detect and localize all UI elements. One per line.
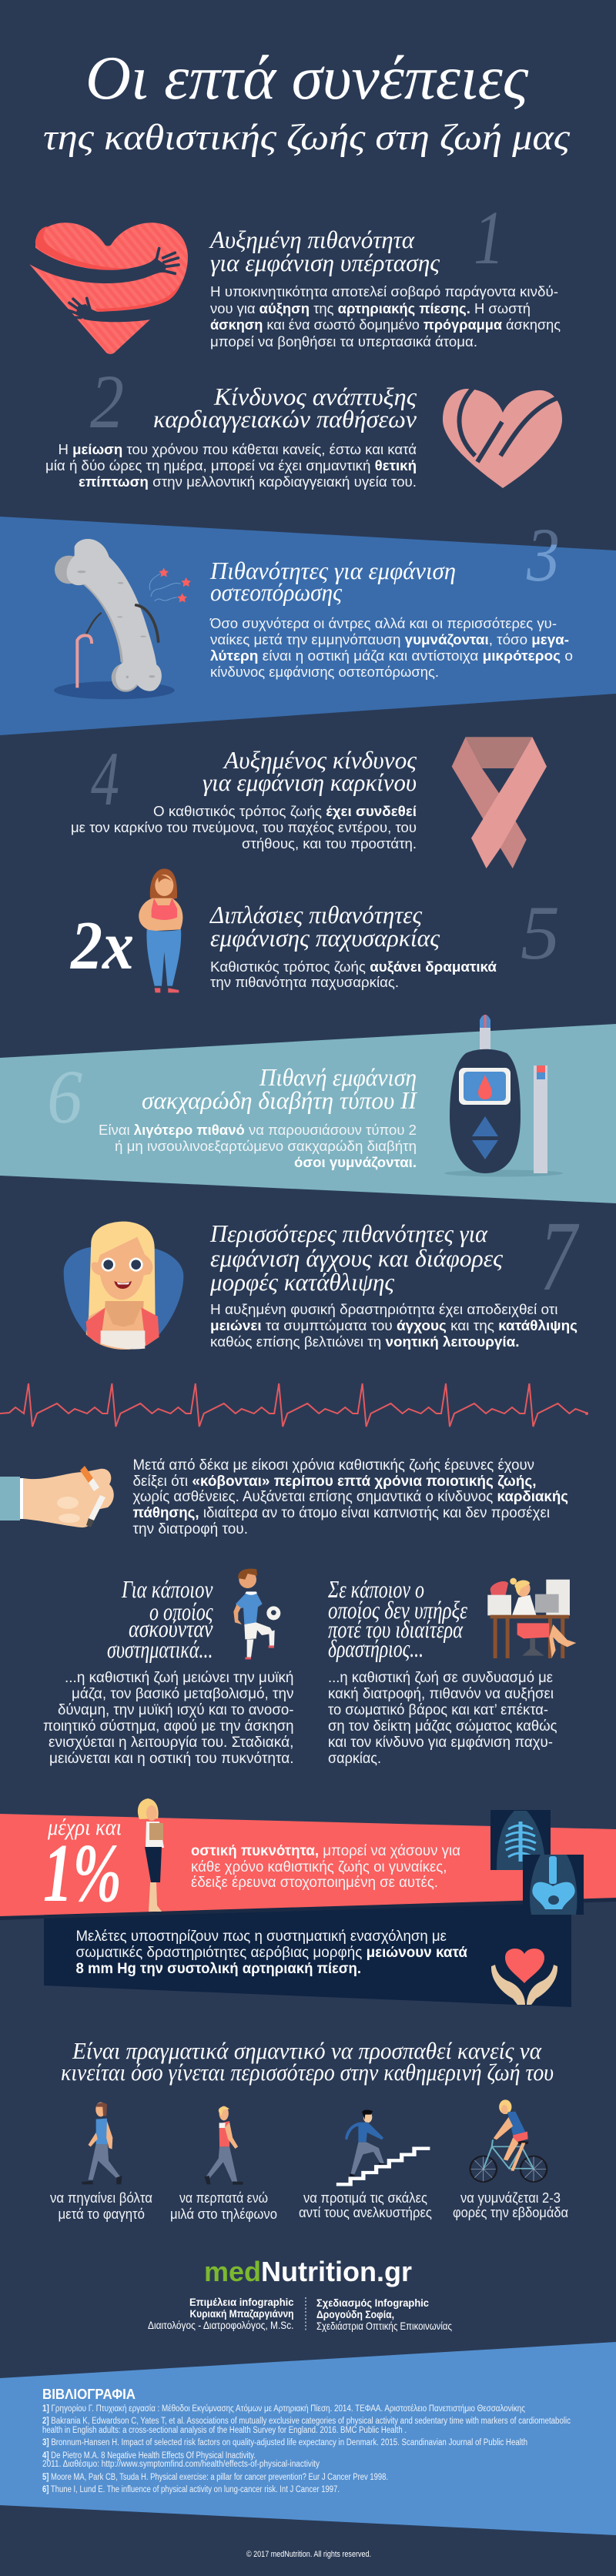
heading [209,1219,504,1296]
section heading: daily movement [61,2037,554,2086]
body text: σαρκίας. [328,1751,381,1767]
body text [210,284,561,350]
body text: blood pressure: Μελέτες υποστηρίζουν πως η συστηματική ενασχόληση με [75,1929,447,1945]
number 6: 6 [47,1054,82,1139]
label: up to: μέχρι και [47,1815,122,1840]
body text: δύναμη, την μυϊκή ισχύ και το ανοσο- [58,1702,294,1718]
icon: ribbon [452,737,547,868]
references: health in English adults: a cross-sectional analysis of the Health Survey for England. 2016. BMC Public Health . [42,2426,407,2435]
heading: Περισσότερες πιθανότητες για [209,1219,488,1247]
figure: stairs climber [299,2109,432,2220]
body text: κάθε χρόνο καθιστικής ζωής οι γυναίκες, [191,1859,447,1875]
references: 4] De Pietro M.A. 8 Negative Health Effects Of Physical Inactivity. [42,2451,256,2461]
references: 1] Γρηγορίου Γ. Πτυχιακή εργασία : Μέθοδοι Εκγύμνασης Ατόμων με Αρτηριακή Πίεση. 2014. ΤΕΦΑΑ. Αριστοτέλειο Πανεπιστήμιο Θεσσαλονίκης [42,2404,525,2414]
heading: Σε κάποιον ο [327,1575,424,1603]
body text [209,616,573,680]
heading [327,1575,467,1662]
body text: μειώνεται και η οστική του πυκνότητα. [49,1751,294,1767]
title: Οι επτά συνέπειες [85,45,529,112]
label [299,2190,432,2220]
icon: blonde woman [64,1222,183,1350]
number 3: 3 [526,512,560,597]
body text: στήθους, και του προστάτη. [242,836,417,851]
label: να περπατά ενώ [179,2190,268,2206]
label: 2x: 2x [69,908,134,984]
body text: blood pressure: σωματικές δραστηριότητες αερόβιας μορφής μειώνουν κατά [75,1945,467,1961]
body text: Είναι λιγότερο πιθανό να παρουσιάσουν τύπου 2 [99,1122,417,1138]
body text: blood pressure: 8 mm Hg την συστολική αρτηριακή πίεση. [75,1961,361,1977]
heading: Αυξημένος κίνδυνος [223,746,417,774]
body text: Καθιστικός τρόπος ζωής αυξάνει δραματικά [210,959,497,975]
label: αντί τους ανελκυστήρες [299,2205,432,2220]
icon: pelvis x-ray [523,1855,584,1915]
heading: σακχαρώδη διαβήτη τύπου ΙΙ [142,1086,417,1114]
references: 5] Moore MA, Park CB, Tsuda H. Physical exercise: a pillar for cancer prevention? Eur J Cancer Prev 1998. [42,2473,388,2482]
heading [107,1575,213,1663]
text block: την διατροφή του. [132,1521,248,1537]
panel: smoking [0,1457,568,1537]
panel: 3 osteoporosis band [0,512,616,735]
credit: designer [316,2297,452,2332]
body text: και τον κίνδυνο για εμφάνιση παχυ- [328,1735,553,1751]
logo: medNutrition.gr: medNutrition.gr [204,2256,412,2287]
heading: για εμφάνιση υπέρτασης [210,249,440,276]
body text: μειώνει τα συμπτώματα του άγχους και της κατάθλιψης [210,1318,578,1333]
body text [45,442,417,490]
heading: Πιθανότητες για εμφάνιση [209,557,456,584]
heading: Πιθανή εμφάνιση [259,1063,417,1091]
icon: broken heart [443,387,562,488]
body text: κίνδυνος εμφάνισης οστεοπόρωσης. [210,664,439,680]
body text: καθώς επίσης βελτιώνει τη νοητική λειτουργία. [210,1334,519,1350]
icon: hugged heart [28,222,193,354]
label: 1%: 1% [43,1828,122,1919]
credit: editor: Επιμέλεια infographic [189,2296,294,2308]
body text: επίπτωση στην μελλοντική καρδιαγγειακή υγεία του. [79,474,417,490]
credit: designer: Δρογούδη Σοφία, [316,2308,394,2320]
label: να γυμνάζεται 2-3 [460,2190,561,2206]
label: μιλά στο τηλέφωνο [170,2206,277,2222]
text block: πάθησης, ιδιαίτερα αν το άτομο είναι καπνιστής και δεν προσέχει [132,1505,550,1521]
heading: δραστήριος... [328,1634,424,1662]
title [43,45,571,158]
body text [328,1670,557,1767]
panel: bone density band [0,1798,616,2007]
panel: active person column [43,1569,294,1767]
body text [191,1843,460,1891]
heartbeat line [0,1383,588,1427]
number 5: 5 [521,890,560,975]
body text: Ο καθιστικός τρόπος ζωής έχει συνδεθεί [153,804,417,819]
icon: hand with cigarette [0,1466,114,1527]
icon: walking man in red [204,2106,243,2185]
dark panel: blood pressure background [44,1894,571,2007]
heading: καρδιαγγειακών παθήσεων [153,405,417,433]
credit: designer: Σχεδιασμός Infographic [316,2297,429,2309]
body text [210,1302,578,1350]
credit: editor [148,2296,294,2331]
icon: bent bone with cane [54,539,191,699]
credit: editor: Κυριακή Μπαζαργιάννη [189,2307,294,2320]
body text: την πιθανότητα παχυσαρκίας. [210,975,399,990]
icon: woman at office desk [487,1578,576,1658]
figure: phone walker [170,2106,277,2222]
label: φορές την εβδομάδα [453,2205,568,2220]
body text [99,1122,417,1171]
heading: Διπλάσιες πιθανότητες [209,901,423,928]
number 4: 4 [91,736,119,821]
panel: 7 anxiety [64,1201,580,1350]
body text: οστική πυκνότητα, μπορεί να χάσουν για [191,1843,460,1859]
body text: ή μη ινσουλινοεξαρτώμενο σακχαρώδη διαβήτη [115,1139,417,1154]
body text: κακή διατροφή, πιθανόν να αυξήσει [328,1686,554,1702]
heading: για εμφάνιση καρκίνου [203,768,417,796]
heading [153,383,417,433]
body text: Όσο συχνότερα οι άντρες αλλά και οι περισσότερες γυ- [209,616,557,631]
icon: chest x-ray [490,1810,551,1870]
label: να προτιμά τις σκάλες [303,2190,427,2206]
section heading: daily movement: Είναι πραγματικά σημαντικό να προσπαθεί κανείς να [72,2037,542,2064]
text block: Μετά από δέκα με είκοσι χρόνια καθιστικής ζωής έρευνες έχουν [132,1457,534,1474]
heading [209,226,440,276]
number 7: 7 [540,1201,580,1312]
body text: ναίκες μετά την εμμηνόπαυση γυμνάζονται , τόσο μεγα- [210,632,569,648]
panel: 6 diabetes band [0,1015,616,1203]
references: 2011. Διαθέσιμο: http://www.symptomfind.com/health/effects-of-physical-inactivity [42,2460,320,2469]
body text: μάζα, τον βασικό μεταβολισμό, την [72,1686,294,1702]
figure: cyclist [453,2099,568,2220]
panel: inactive person column [327,1575,576,1767]
body text: έδειξε έρευνα στοχοποιημένη σε αυτές. [191,1875,438,1891]
heading: εμφάνισης παχυσαρκίας [210,924,440,952]
body text: ...η καθιστική ζωή μειώνει την μυϊκή [65,1670,294,1686]
credit: editor: Διαιτολόγος - Διατροφολόγος, M.Sc. [148,2319,294,2331]
body text: ενισχύεται η λειτουργία του. Σταδιακά, [49,1735,294,1751]
panel: 5 obesity [69,868,560,992]
heading [142,1063,417,1114]
icon: woman with clipboard [138,1798,164,1912]
heading: εμφάνιση άγχους και διάφορες [210,1244,504,1272]
references: 3] Bronnum-Hansen H. Impact of selected risk factors on quality-adjusted life expectancy in Denmark. 2015. Scandinavian Journal of Public Health [42,2438,527,2447]
heading: ασκούνταν [129,1614,213,1642]
number 2: 2 [90,359,124,444]
heading: Για κάποιον [121,1575,213,1603]
body text: άσκηση και ένα σωστό δομημένο πρόγραμμα άσκησης [210,317,561,333]
heading [209,901,440,952]
heading: οποίος δεν υπήρξε [328,1596,467,1624]
panel: 2 cardiovascular [45,359,562,490]
body text: ποιητικό σύστημα, αφού με την άσκηση [43,1718,294,1735]
heading: Αυξημένη πιθανότητα [209,226,415,253]
label [170,2190,277,2222]
references [42,2404,571,2494]
icon: soccer player [233,1569,280,1659]
body text: όσοι γυμνάζονται. [294,1155,417,1171]
icon: hands holding heart [491,1949,557,2005]
label: μετά το φαγητό [59,2206,145,2222]
heading [209,557,456,606]
body text [43,1670,294,1767]
icon: man on bicycle [470,2099,547,2182]
text block: χωρίς ασθένειες. Αυξάνεται επίσης σημαντικά ο κίνδυνος καρδιακής [132,1489,568,1505]
label [453,2190,568,2220]
body text: το σωματικό βάρος και κατ’ επέκτα- [328,1702,548,1718]
figure: walker [50,2103,152,2222]
body text: μπορεί να βοηθήσει τα υπερτασικά άτομα. [210,334,477,350]
body text: Η υποκινητικότητα αποτελεί σοβαρό παράγοντα κινδύ- [210,284,558,299]
body text: ση τον δείκτη μάζας σώματος καθώς [328,1718,557,1735]
title: της καθιστικής ζωής στη ζωή μας [43,117,571,158]
body text: νου για αύξηση της αρτηριακής πίεσης. Η σωστή [210,301,531,317]
body text: ...η καθιστική ζωή σε συνδυασμό με [328,1670,554,1686]
panel: bibliography band [0,2342,616,2535]
label: να πηγαίνει βόλτα [50,2190,152,2206]
heading: ποτέ του ιδιαίτερα [328,1615,464,1643]
heading: ο οποίος [149,1597,213,1625]
body text: Η μείωση του χρόνου που κάθεται κανείς, έστω και κατά [59,442,417,457]
heading: Κίνδυνος ανάπτυξης [213,383,417,410]
icon: overweight woman [139,868,182,992]
panel: 1 hypertension [28,195,561,354]
heading: ΒΙΒΛΙΟΓΡΑΦΙΑ [42,2387,136,2402]
credits [148,2296,452,2332]
body text: λύτερη είναι η οστική μάζα και αντίστοιχα μικρότερος ο [210,648,573,664]
body text: Η αυξημένη φυσική δραστηριότητα έχει αποδειχθεί οτι [210,1302,557,1317]
references: 6] Thune I, Lund E. The influence of physical activity on lung-cancer risk. Int J Cancer 1997. [42,2485,340,2494]
panel: 4 cancer [71,736,547,868]
body text [71,804,417,851]
icon: glucose meter [444,1015,563,1176]
body text: με τον καρκίνο του πνεύμονα, του παχέος εντέρου, του [71,820,417,835]
icon: walking man [82,2103,122,2184]
heading: οστεοπόρωσης [210,578,343,606]
text block [132,1457,568,1537]
heading [203,746,417,796]
credit: designer: Σχεδιάστρια Οπτικής Επικοινωνίας [316,2320,452,2332]
heading: συστηματικά... [107,1635,213,1663]
heading: μορφές κατάθλιψης [209,1268,395,1296]
number 1: 1 [474,195,504,280]
copyright: © 2017 medNutrition. All rights reserved. [246,2550,371,2559]
label [50,2190,152,2222]
icon: man on stairs [336,2109,430,2184]
body text: μία ή δύο ώρες τη ημέρα, μπορεί να έχει σημαντική θετική [45,458,417,473]
body text: blood pressure [75,1929,467,1977]
body text [210,959,497,990]
text block: δείξει ότι «κόβονται» περίπου επτά χρόνια ποιοτικής ζωής, [132,1474,536,1490]
section heading: daily movement: κινείται όσο γίνεται περισσότερο στην καθημερινή ζωή του [61,2059,554,2086]
